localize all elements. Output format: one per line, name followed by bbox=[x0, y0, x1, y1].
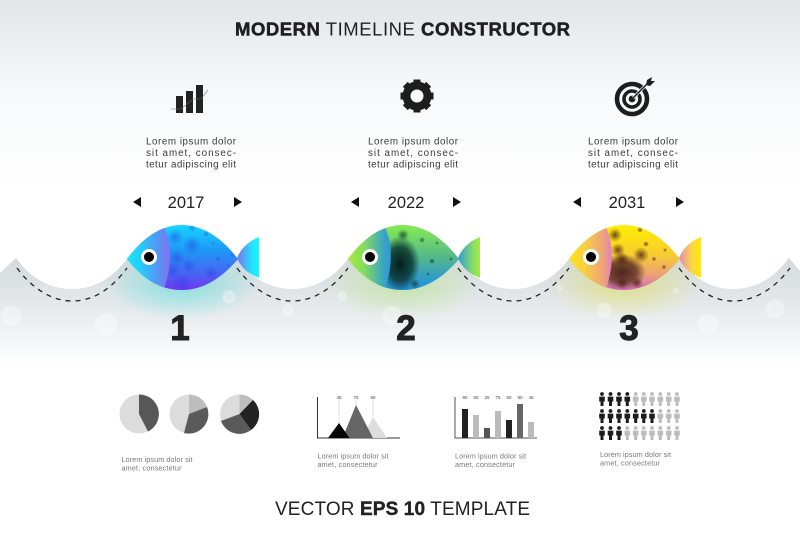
fish 1: blue bbox=[127, 225, 259, 290]
year selector 2017: 2017 bbox=[168, 194, 204, 212]
dashed timeline path bbox=[17, 268, 790, 301]
text block: column 3: sit amet, consec- bbox=[588, 148, 678, 159]
year selector 2031 bbox=[573, 194, 684, 212]
caption: bar chart bbox=[455, 452, 526, 469]
fish 3: yellow bbox=[569, 225, 701, 290]
caption: people chart bbox=[600, 450, 671, 468]
pie chart 3 bbox=[220, 394, 259, 434]
text block: column 3 bbox=[588, 136, 679, 170]
bar chart: 25 bbox=[484, 395, 490, 400]
year selector 2022: 2022 bbox=[388, 194, 424, 212]
number 1: 1 bbox=[170, 309, 190, 348]
bar chart: 60 bbox=[473, 395, 479, 400]
year selector 2022 bbox=[351, 194, 461, 212]
people chart bbox=[599, 392, 680, 440]
text block: column 1 bbox=[146, 136, 237, 170]
caption: area chart: amet, consectetur bbox=[318, 460, 378, 469]
area chart: 60 bbox=[370, 395, 376, 400]
area chart: 75 bbox=[353, 395, 359, 400]
year selector 2031: 2031 bbox=[609, 194, 645, 212]
bar chart: 75 bbox=[495, 395, 501, 400]
caption: pie charts bbox=[122, 455, 192, 472]
water wave bbox=[0, 258, 800, 348]
caption: area chart: Lorem ipsum dolor sit bbox=[318, 452, 388, 460]
text block: column 1: Lorem ipsum dolor bbox=[146, 136, 237, 148]
top shading bbox=[0, 0, 800, 190]
text block: column 1: tetur adipiscing elit bbox=[146, 160, 236, 170]
caption: people chart: Lorem ipsum dolor sit bbox=[600, 450, 671, 459]
icon: gear bbox=[400, 80, 434, 112]
caption: pie charts: amet, consectetur bbox=[122, 464, 182, 472]
area chart bbox=[318, 395, 400, 438]
caption: bar chart: Lorem ipsum dolor sit bbox=[455, 452, 526, 460]
text block: column 1: sit amet, consec- bbox=[146, 148, 236, 159]
caption: pie charts: Lorem ipsum dolor sit bbox=[122, 455, 192, 464]
text block: column 2: tetur adipiscing elit bbox=[368, 160, 458, 170]
number 2: 2 bbox=[396, 309, 416, 348]
bar chart: 80 bbox=[462, 395, 468, 400]
caption: bar chart: amet, consectetur bbox=[455, 460, 516, 469]
number 3: 3 bbox=[619, 309, 639, 348]
text block: column 2: sit amet, consec- bbox=[368, 148, 458, 159]
caption: people chart: amet, consectetur bbox=[600, 458, 661, 468]
title: MODERN TIMELINE CONSTRUCTOR bbox=[235, 18, 570, 40]
bar chart: 45 bbox=[528, 395, 534, 400]
text block: column 3: tetur adipiscing elit bbox=[588, 160, 678, 170]
pie chart 1 bbox=[120, 394, 159, 434]
bar chart: 50 bbox=[506, 395, 512, 400]
area chart: 45 bbox=[336, 395, 342, 400]
bar chart: 90 bbox=[517, 395, 523, 400]
caption: area chart bbox=[318, 452, 388, 469]
bar chart bbox=[455, 395, 537, 438]
footer title: VECTOR EPS 10 TEMPLATE bbox=[275, 499, 530, 520]
icon: bar chart bbox=[171, 85, 208, 113]
fish 2: green bbox=[348, 225, 480, 290]
year selector 2017 bbox=[133, 194, 242, 212]
text block: column 3: Lorem ipsum dolor bbox=[588, 136, 679, 148]
text block: column 2: Lorem ipsum dolor bbox=[368, 136, 459, 148]
icon: target bbox=[617, 77, 655, 114]
text block: column 2 bbox=[368, 136, 459, 170]
pie chart 2 bbox=[170, 394, 208, 434]
